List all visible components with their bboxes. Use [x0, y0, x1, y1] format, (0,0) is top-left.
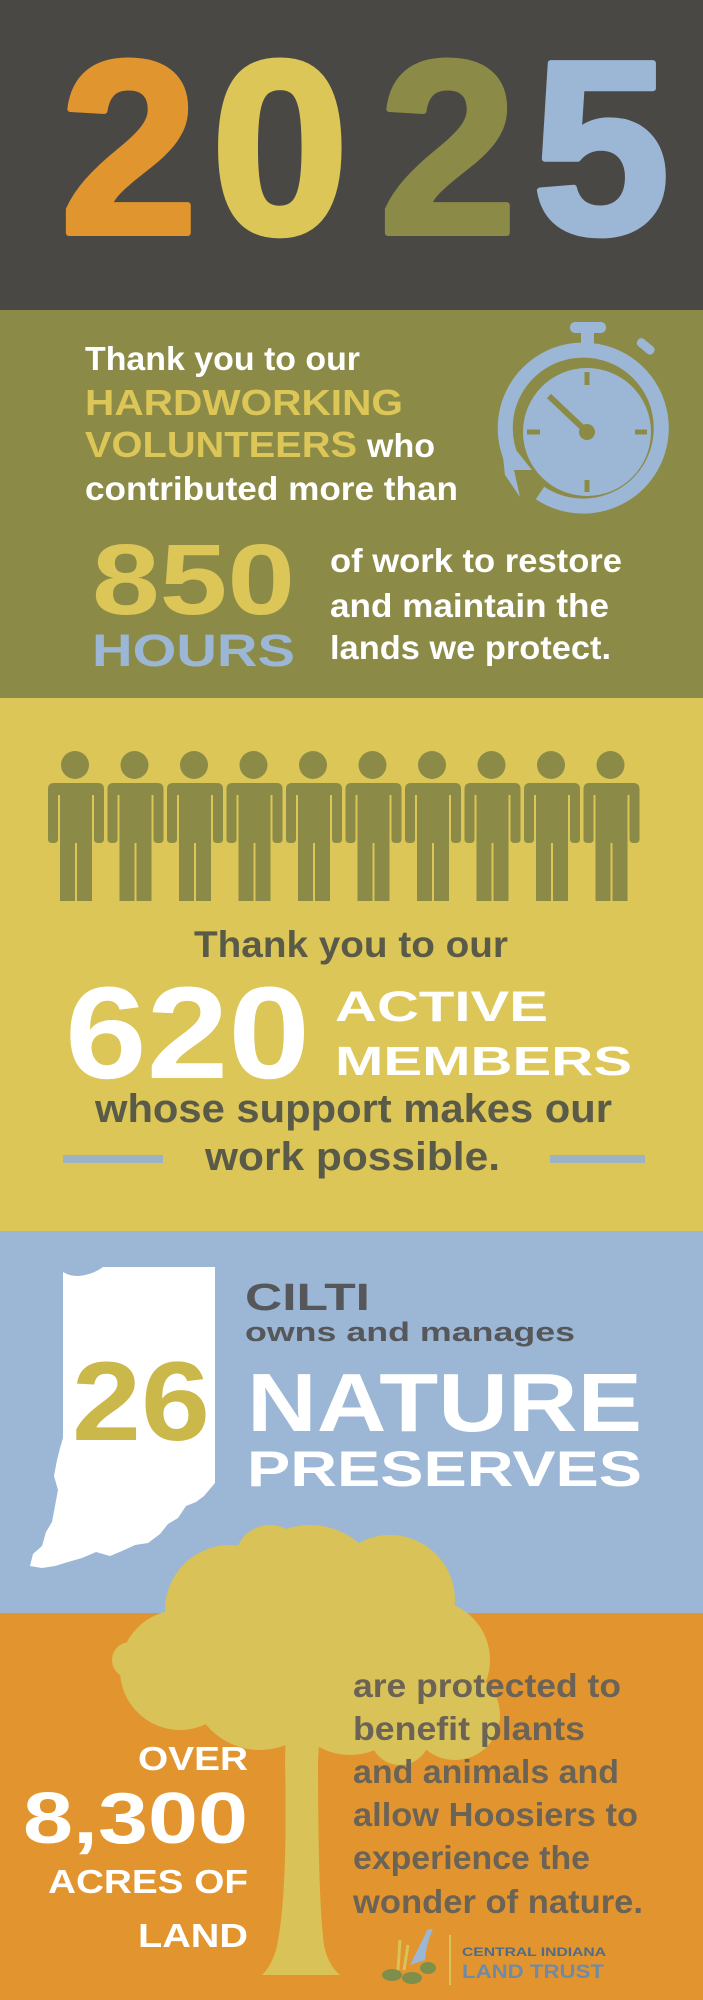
panel: preserves — [0, 1231, 703, 1613]
stat: 850 hours — [92, 524, 295, 676]
text: land description: are protected to — [353, 1667, 621, 1704]
text: land description: experience the — [353, 1839, 590, 1876]
text: nature preserves: PRESERVES — [247, 1441, 642, 1497]
text: volunteers intro: who — [366, 427, 435, 464]
text: land description — [352, 1667, 643, 1920]
title: 2025: 2 — [60, 10, 198, 286]
text: active members — [335, 983, 632, 1084]
text: volunteers intro: VOLUNTEERS — [85, 424, 357, 465]
panel: header — [0, 0, 703, 310]
text: over 8,300 acres: 8,300 — [23, 1779, 248, 1859]
text: nature preserves: NATURE — [247, 1356, 642, 1449]
text: active members: ACTIVE — [335, 983, 548, 1031]
text: active members: MEMBERS — [335, 1038, 632, 1084]
text: land description: and animals and — [353, 1753, 619, 1790]
text: hours description: lands we protect. — [330, 629, 611, 666]
text: whose support: work possible. — [204, 1135, 500, 1179]
text: hours description: of work to restore — [330, 542, 622, 579]
panel: members — [0, 698, 703, 1231]
panel: land — [0, 1525, 703, 2000]
text: CILTI owns: owns and manages — [245, 1317, 575, 1347]
text: hours description — [330, 542, 622, 666]
text: whose support — [94, 1087, 612, 1179]
text: land description: benefit plants — [353, 1710, 585, 1747]
text: volunteers intro: Thank you to our — [85, 340, 360, 377]
text: over 8,300 acres: ACRES OF — [48, 1863, 248, 1900]
text: CILTI owns: CILTI — [245, 1277, 370, 1319]
text: over 8,300 acres — [23, 1740, 248, 1954]
text: hours description: and maintain the — [330, 587, 609, 624]
stat: 850 hours: 850 — [92, 524, 295, 636]
text: over 8,300 acres: OVER — [138, 1740, 248, 1777]
stat: 850 hours: HOURS — [92, 625, 295, 676]
title: 2025 — [60, 10, 670, 286]
logo: Central Indiana Land Trust: LAND TRUST — [462, 1962, 604, 1983]
text: land description: wonder of nature. — [352, 1883, 643, 1920]
text: volunteers intro: contributed more than — [85, 470, 458, 507]
title: 2025: 5 — [532, 10, 670, 286]
icon: Indiana map — [30, 1267, 215, 1568]
text: over 8,300 acres: LAND — [138, 1917, 248, 1954]
icon: people row — [48, 751, 640, 901]
text: whose support: whose support makes our — [94, 1087, 612, 1131]
stat: 26: 26 — [72, 1339, 210, 1464]
icon: tree — [112, 1525, 500, 1975]
title: 2025: 0 — [211, 10, 349, 286]
panel: volunteers — [0, 310, 703, 698]
text: nature preserves — [247, 1356, 642, 1497]
logo: Central Indiana Land Trust — [382, 1929, 606, 1985]
text: volunteers intro: HARDWORKING — [85, 382, 403, 423]
icon: stopwatch — [500, 322, 661, 506]
text: CILTI owns — [245, 1277, 575, 1347]
stat: 620: 620 — [65, 959, 310, 1106]
text: land description: allow Hoosiers to — [353, 1796, 638, 1833]
text: volunteers intro — [85, 340, 458, 507]
title: 2025: 2 — [379, 10, 517, 286]
logo: Central Indiana Land Trust: CENTRAL INDIANA — [462, 1945, 606, 1959]
text: thank members: Thank you to our — [194, 924, 508, 965]
